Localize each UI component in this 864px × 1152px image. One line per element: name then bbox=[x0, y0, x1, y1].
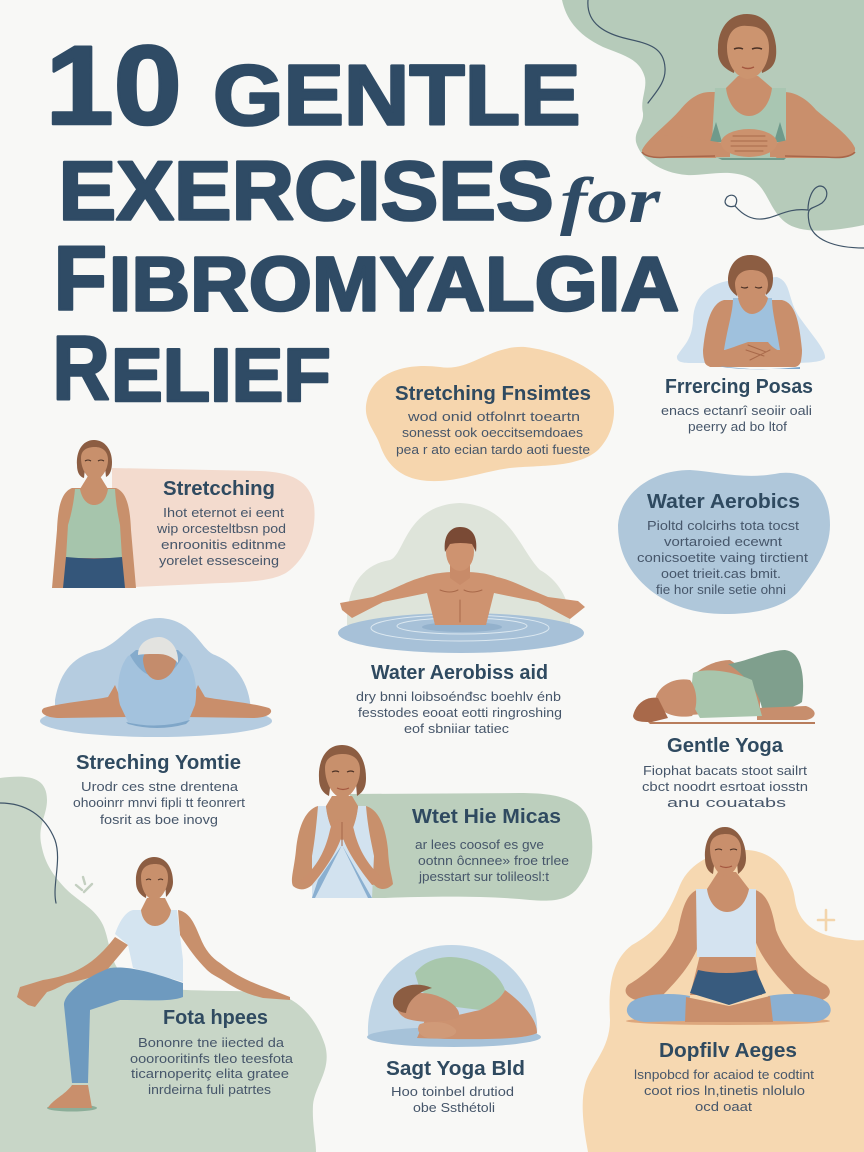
text: Sagt Yoga Bld: obe Ssthétoli bbox=[413, 1100, 495, 1115]
text: Gentle Yoga: Fiophat bacats stoot sailrt bbox=[643, 763, 807, 778]
text: Water Aerobiss aid bbox=[356, 662, 562, 736]
panel: Dopfilv Aeges with meditating woman: ocd oaat bbox=[695, 1099, 752, 1114]
panel: Stretching: wip orcesteltbsn pod bbox=[156, 521, 286, 536]
text: Streching Yomtie: Streching Yomtie bbox=[76, 752, 241, 774]
panel: Dopfilv Aeges with meditating woman bbox=[583, 827, 864, 1152]
title: for bbox=[560, 164, 661, 236]
text: Gentle Yoga bbox=[642, 735, 808, 810]
panel: Water Aerobics: vortaroied ecewnt bbox=[664, 534, 782, 549]
panel: Dopfilv Aeges with meditating woman: coot rios ln,tinetis nlolulo bbox=[644, 1083, 805, 1098]
title: F bbox=[54, 227, 107, 329]
panel: Stretching bbox=[52, 440, 315, 588]
panel: Stretching Fnsimtes: sonesst ook oeccitsemdoaes bbox=[402, 425, 584, 440]
panel: Water Aerobics: conicsoetite vaing tirctient bbox=[637, 550, 808, 565]
panel: Fota hpees with seated woman: ooorooritinfs tleo teesfota bbox=[130, 1051, 294, 1066]
panel: Wtet Hie Micas: Wtet Hie Micas bbox=[412, 806, 561, 828]
panel: Fota hpees with seated woman: ticarnoperitç elita gratee bbox=[131, 1066, 289, 1081]
panel: Dopfilv Aeges with meditating woman: Dopfilv Aeges bbox=[659, 1040, 797, 1062]
text: Streching Yomtie: ohooinrr mnvi fipli tt feonrert bbox=[73, 795, 245, 810]
text: Streching Yomtie: Urodr ces stne drentena bbox=[81, 779, 239, 794]
panel: Fota hpees with seated woman: Fota hpees bbox=[163, 1007, 268, 1029]
panel: Stretching Fnsimtes: Stretching Fnsimtes bbox=[395, 383, 591, 405]
panel: Fota hpees with seated woman: Bononre tne iiected da bbox=[138, 1035, 285, 1050]
panel: Water Aerobics bbox=[618, 470, 830, 614]
panel: Stretching: yorelet essesceing bbox=[159, 553, 279, 568]
text: Water Aerobiss aid: eof sbniiar tatiec bbox=[404, 721, 510, 736]
title: EXERCISES bbox=[58, 145, 554, 238]
blob: top right sage background bbox=[562, 0, 864, 231]
figure: seated woman bbox=[17, 857, 290, 1112]
title: GENTLE bbox=[213, 47, 581, 143]
panel: Stretching Fnsimtes: pea r ato ecian tardo aoti fueste bbox=[396, 442, 590, 457]
text: Frrercing Posas bbox=[661, 376, 813, 434]
panel: Wtet Hie Micas: ootnn ôcnnee» froe trlee bbox=[418, 853, 569, 868]
title bbox=[46, 23, 679, 420]
text: Gentle Yoga: Gentle Yoga bbox=[667, 735, 784, 757]
text: Frrercing Posas: enacs ectanrî seoiir oali bbox=[661, 403, 812, 418]
panel: Stretching: Stretcching bbox=[163, 478, 275, 500]
text: Streching Yomtie bbox=[73, 752, 245, 827]
icon: sparkle right bbox=[818, 910, 834, 930]
panel: Water Aerobics: Water Aerobics bbox=[647, 491, 800, 513]
figure: blue blob with woman, top right bbox=[677, 255, 825, 369]
figure: meditating woman bbox=[626, 827, 831, 1025]
figure: curled person under dome bbox=[367, 945, 541, 1047]
text: Water Aerobiss aid: dry bnni loibsoénđsc boehlv énb bbox=[356, 689, 561, 704]
text: Water Aerobiss aid: Water Aerobiss aid bbox=[371, 662, 548, 684]
panel: Stretching Fnsimtes: wod onid otfolnrt toeartn bbox=[407, 409, 580, 424]
text: Frrercing Posas: peerry ad bo ltof bbox=[688, 419, 787, 434]
icon: sparkle left bbox=[76, 877, 92, 892]
figure: woman with hands together, top right bbox=[642, 14, 855, 160]
panel: Wtet Hie Micas bbox=[292, 745, 592, 901]
figure: man in water bbox=[338, 503, 585, 653]
panel: Water Aerobics: Pioltd colcirhs tota tocst bbox=[647, 518, 799, 533]
figure: person bending forward, blue blob bbox=[40, 618, 272, 737]
decorative line: left curve bbox=[0, 803, 58, 903]
text: Streching Yomtie: fosrit as boe inovg bbox=[100, 812, 218, 827]
panel: Fota hpees with seated woman bbox=[0, 777, 327, 1152]
panel: Water Aerobics: fie hor snile setie ohni bbox=[656, 582, 786, 597]
text: Frrercing Posas: Frrercing Posas bbox=[665, 376, 813, 398]
title: ELIEF bbox=[111, 334, 331, 418]
decorative line: top right curls bbox=[588, 0, 864, 248]
text: Water Aerobiss aid: fesstodes eooat eotti ringroshing bbox=[358, 705, 562, 720]
panel: Dopfilv Aeges with meditating woman: lsnpobcd for acaiod te codtint bbox=[634, 1067, 814, 1082]
text: Gentle Yoga: cbct noodrt esrtoat iosstn bbox=[642, 779, 808, 794]
title: R bbox=[52, 319, 110, 420]
panel: Stretching Fnsimtes bbox=[366, 347, 614, 481]
panel: Water Aerobics: ooet trieit.cas bmit. bbox=[661, 566, 781, 581]
text: Gentle Yoga: anu couatabs bbox=[667, 795, 787, 810]
figure: woman lying curled bbox=[633, 650, 815, 724]
panel: Wtet Hie Micas: jpesstart sur tolileosl:t bbox=[418, 869, 549, 884]
text: Sagt Yoga Bld: Sagt Yoga Bld bbox=[386, 1058, 525, 1080]
panel: Stretching: enroonitis editnme bbox=[161, 537, 286, 552]
title: 10 bbox=[46, 23, 182, 148]
text: Sagt Yoga Bld bbox=[386, 1058, 525, 1115]
figure: woman with praying hands bbox=[292, 745, 393, 898]
panel: Wtet Hie Micas: ar lees coosof es gve bbox=[415, 837, 544, 852]
panel: Fota hpees with seated woman: inrdeirna fuli patrtes bbox=[148, 1082, 272, 1097]
panel: Stretching: Ihot eternot ei eent bbox=[163, 505, 284, 520]
figure: standing woman bbox=[52, 440, 136, 588]
text: Sagt Yoga Bld: Hoo toinbel drutiod bbox=[391, 1084, 514, 1099]
title: IBROMYALGIA bbox=[109, 240, 679, 327]
